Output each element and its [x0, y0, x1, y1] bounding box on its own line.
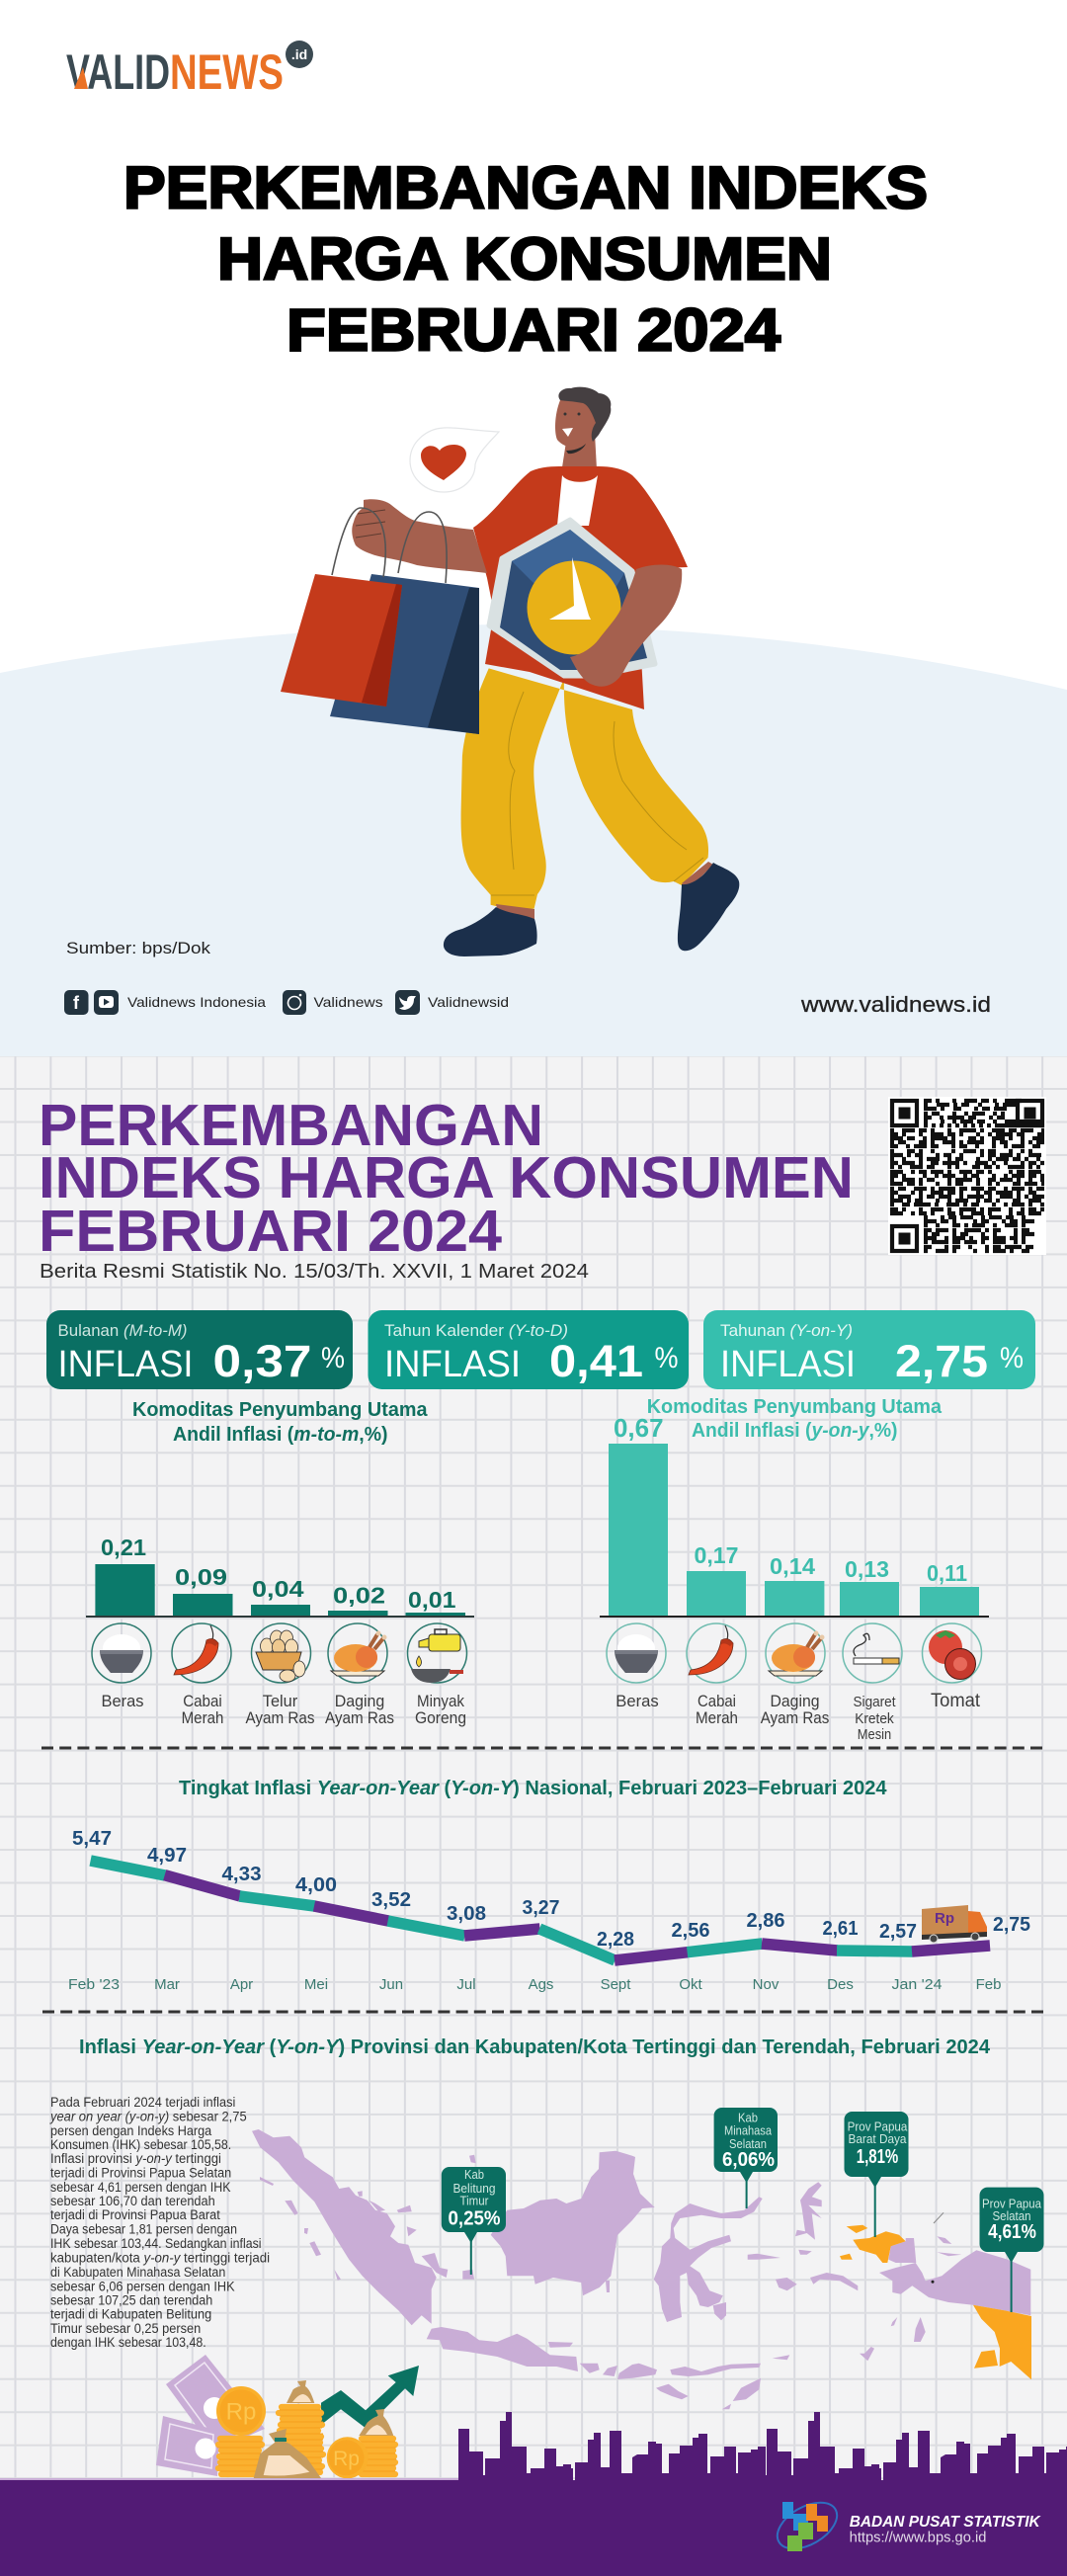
BPS logo: [770, 2493, 845, 2558]
map heading: Inflasi Year-on-Year (Y-on-Y) Provinsi dan Kabupaten/Kota Tertinggi dan Terendah, Februari 2024: [79, 2036, 991, 2058]
explanatory paragraph: terjadi di Provinsi Papua Selatan: [50, 2166, 231, 2180]
commodity labels: Telur: [263, 1693, 298, 1710]
icon: red chili: [172, 1623, 231, 1683]
commodity labels: Beras: [101, 1693, 144, 1710]
line chart: national y-on-y inflation: 3,08: [447, 1902, 486, 1925]
callout: Kab Belitung Timur: [442, 2167, 506, 2275]
card: year-to-date inflation: INFLASI: [384, 1344, 521, 1385]
chart heading: [132, 1398, 428, 1446]
chart heading: Komoditas Penyumbang Utama: [132, 1398, 428, 1421]
main title: PERKEMBANGAN INDEKS: [123, 154, 928, 221]
province: Papua Barat Daya: [840, 2225, 906, 2263]
blue shopping bag: [330, 512, 479, 734]
social name: Validnews Indonesia: Validnews Indonesia: [127, 994, 266, 1010]
icon: tomato: [923, 1623, 982, 1683]
line chart: national y-on-y inflation: Des: [827, 1976, 854, 1993]
explanatory paragraph: sebesar 4,61 persen dengan IHK: [50, 2180, 231, 2195]
Maluku islands: [748, 2182, 961, 2361]
island: Sumatra: [252, 2129, 437, 2325]
commodity labels: Sigaret: [854, 1694, 896, 1710]
card: year-on-year inflation: 2,75: [895, 1336, 988, 1386]
card: year-to-date inflation: Tahun Kalender (Y-to-D): [384, 1321, 568, 1340]
card: monthly inflation: [46, 1310, 353, 1389]
chart heading: Komoditas Penyumbang Utama: [647, 1395, 943, 1418]
explanatory paragraph: dengan IHK sebesar 103,48.: [50, 2335, 206, 2350]
card: year-on-year inflation: Tahunan (Y-on-Y): [720, 1321, 853, 1340]
infographic title: PERKEMBANGAN: [39, 1092, 543, 1158]
icon: twitter: [395, 990, 420, 1015]
bar chart: 0,04: [252, 1576, 304, 1602]
main title: [123, 154, 928, 364]
coin: Rp small: [327, 2437, 369, 2478]
commodity labels: Cabai: [183, 1693, 222, 1710]
chart heading: Andil Inflasi (y-on-y,%): [692, 1419, 897, 1442]
callout: Kab Belitung Timur: Belitung: [452, 2181, 496, 2196]
coin: Rp small: Rp: [333, 2448, 360, 2470]
bar chart: 0,67: [614, 1413, 664, 1443]
explanatory paragraph: sebesar 6,06 persen dengan IHK: [50, 2279, 235, 2294]
explanatory paragraph: Daya sebesar 1,81 persen dengan: [50, 2221, 237, 2236]
explanatory paragraph: Inflasi provinsi y-on-y tertinggi: [50, 2151, 221, 2166]
line chart: national y-on-y inflation: 3,27: [522, 1896, 559, 1919]
explanatory paragraph: Timur sebesar 0,25 persen: [50, 2321, 201, 2336]
line chart: national y-on-y inflation: Jun: [379, 1976, 403, 1993]
bar chart: 0,13: [845, 1556, 889, 1582]
social name: Validnews: Validnews: [314, 994, 383, 1010]
explanatory paragraph: sebesar 106,70 dan terendah: [50, 2194, 215, 2208]
callout: Prov Papua Barat Daya: Prov Papua: [848, 2119, 908, 2134]
line chart: national y-on-y inflation: 4,33: [221, 1863, 261, 1885]
icon: cigarette: [843, 1623, 902, 1683]
callout: Prov Papua Barat Daya: 1,81%: [857, 2146, 898, 2168]
bar chart: [600, 1413, 989, 1617]
card: year-on-year inflation: INFLASI: [720, 1344, 856, 1385]
bar chart: [86, 1535, 474, 1617]
yellow trousers: [461, 668, 708, 909]
website: www.validnews.id: [800, 992, 991, 1017]
face: [555, 396, 599, 448]
holding arm: [570, 565, 682, 687]
callout: Kab Belitung Timur: 0,25%: [449, 2208, 501, 2230]
main title: FEBRUARI 2024: [287, 296, 781, 364]
clock shield: [489, 520, 655, 676]
card: year-on-year inflation: %: [1000, 1342, 1024, 1374]
line chart: national y-on-y inflation: Feb '23: [68, 1976, 120, 1993]
line chart: national y-on-y inflation: 2,56: [672, 1919, 709, 1942]
line chart: national y-on-y inflation: Mei: [304, 1976, 328, 1993]
icon: cooking oil: [407, 1623, 466, 1683]
ankles: [496, 862, 713, 921]
line chart: national y-on-y inflation: 3,52: [371, 1888, 411, 1911]
line chart: national y-on-y inflation: [68, 1827, 1030, 1993]
map of Indonesia: [252, 2129, 1031, 2409]
subtitle: release number: Berita Resmi Statistik No. 15/03/Th. XXVII, 1 Maret 2024: [40, 1260, 589, 1283]
line chart: national y-on-y inflation: Jan '24: [891, 1976, 943, 1993]
explanatory paragraph: terjadi di Kabupaten Belitung: [50, 2306, 211, 2321]
card: year-to-date inflation: [368, 1310, 689, 1389]
icon: rice bowl: [607, 1623, 666, 1683]
commodity labels: Tomat: [931, 1691, 981, 1711]
red jacket: [473, 466, 688, 709]
callout: Prov Papua Selatan: [980, 2188, 1043, 2312]
line chart: national y-on-y inflation: Feb: [976, 1976, 1001, 1993]
explanatory paragraph: persen dengan Indeks Harga: [50, 2123, 212, 2138]
callout: Kab Minahasa Selatan: Kab: [738, 2110, 758, 2124]
footer band with skyline: [0, 2412, 1067, 2576]
line chart: national y-on-y inflation: 2,28: [597, 1928, 634, 1951]
commodity labels: Mesin: [858, 1726, 891, 1743]
Validnews logo: VALID: [66, 44, 170, 100]
explanatory paragraph: Konsumen (IHK) sebesar 105,58.: [50, 2137, 231, 2152]
island: Kalimantan: [491, 2151, 655, 2295]
right money bag: [359, 2409, 393, 2436]
Validnews logo: [66, 41, 313, 100]
shoes: [444, 863, 739, 956]
commodity labels: Ayam Ras: [245, 1709, 314, 1727]
explanatory paragraph: sebesar 107,25 dan terendah: [50, 2292, 212, 2307]
icon: instagram: [283, 990, 306, 1015]
province: Papua Selatan: [973, 2305, 1031, 2379]
line chart: national y-on-y inflation: 5,47: [72, 1827, 112, 1850]
callout: Kab Minahasa Selatan: Minahasa: [724, 2122, 773, 2137]
islands around Sumatra: [260, 2155, 476, 2281]
commodity labels: [101, 1693, 466, 1727]
commodity labels: Cabai: [698, 1693, 736, 1710]
line chart: national y-on-y inflation: Jul: [456, 1976, 476, 1993]
social name: Validnewsid: Validnewsid: [428, 994, 509, 1010]
line chart: national y-on-y inflation: 2,57: [879, 1920, 917, 1943]
callout: Kab Minahasa Selatan: 6,06%: [722, 2149, 775, 2171]
card: year-on-year inflation: [703, 1310, 1035, 1389]
commodity labels: Merah: [182, 1709, 223, 1727]
explanatory paragraph: Pada Februari 2024 terjadi inflasi: [50, 2095, 235, 2110]
explanatory paragraph: di Kabupaten Minahasa Selatan: [50, 2265, 225, 2280]
BPS name: BADAN PUSAT STATISTIK: [850, 2514, 1041, 2531]
line chart: national y-on-y inflation: Ags: [529, 1976, 553, 1993]
card: year-to-date inflation: %: [654, 1342, 678, 1374]
bar chart: 0,09: [175, 1564, 227, 1590]
main title: HARGA KONSUMEN: [217, 225, 832, 292]
coin: Rp large: [216, 2386, 266, 2436]
banknotes: [156, 2355, 265, 2476]
social media row: [64, 990, 509, 1015]
Validnews logo: .id: [291, 46, 307, 62]
illustration: shopper with bags and clock shield: [281, 387, 739, 956]
explanatory paragraph: kabupaten/kota y-on-y tertinggi terjadi: [50, 2251, 270, 2265]
line chart: national y-on-y inflation: 2,86: [747, 1909, 784, 1932]
commodity labels: Daging: [771, 1693, 820, 1710]
commodity labels: Minyak: [417, 1693, 465, 1710]
icon: facebook: f: [73, 993, 80, 1013]
line chart heading: Tingkat Inflasi Year-on-Year (Y-on-Y) Nasional, Februari 2023–Februari 2024: [179, 1777, 887, 1799]
middle money bag top: [287, 2380, 314, 2403]
callout: Kab Belitung Timur: Timur: [460, 2194, 489, 2208]
card: monthly inflation: Bulanan (M-to-M): [57, 1321, 188, 1340]
callout: Kab Belitung Timur: Kab: [464, 2167, 484, 2182]
icon: red chili: [687, 1623, 746, 1683]
panel: y-on-y commodity contributions: [600, 1395, 989, 1743]
source caption: Sumber: bps/Dok: [66, 939, 211, 957]
chart heading: [647, 1395, 943, 1442]
commodity labels: Kretek: [855, 1710, 894, 1727]
icon: roast chicken: [766, 1623, 825, 1683]
panel: m-to-m commodity contributions: [86, 1398, 474, 1727]
line chart: national y-on-y inflation: 4,97: [147, 1844, 187, 1867]
bar chart: 0,11: [927, 1560, 967, 1586]
line chart: national y-on-y inflation: Okt: [679, 1976, 702, 1993]
icon: delivery truck: Rp: [935, 1910, 954, 1927]
coin stacks: [218, 2407, 395, 2474]
line chart: national y-on-y inflation: Apr: [230, 1976, 253, 1993]
extended arm: [352, 499, 487, 573]
illustration: money, coins and rising arrow: [156, 2355, 419, 2478]
red shopping bag: [281, 508, 402, 706]
bar chart: 0,02: [333, 1583, 385, 1609]
arrow: [321, 2366, 419, 2428]
icon: eggs: [251, 1623, 310, 1683]
explanatory paragraph: IHK sebesar 103,44. Sedangkan inflasi: [50, 2236, 261, 2251]
infographic title: FEBRUARI 2024: [39, 1198, 502, 1264]
hero background: [0, 0, 1067, 1056]
commodity labels: Ayam Ras: [325, 1709, 394, 1727]
card: monthly inflation: %: [321, 1342, 345, 1374]
explanatory paragraph: terjadi di Provinsi Papua Barat: [50, 2207, 220, 2222]
chart heading: Andil Inflasi (m-to-m,%): [173, 1423, 387, 1446]
commodity labels: Ayam Ras: [761, 1709, 829, 1727]
commodity labels: Daging: [335, 1693, 384, 1710]
island: Sulawesi: [654, 2197, 763, 2322]
Validnews logo: NEWS: [170, 44, 284, 100]
QR code: [888, 1097, 1046, 1255]
line chart: national y-on-y inflation: Sept: [601, 1976, 631, 1993]
card: year-to-date inflation: 0,41: [549, 1336, 643, 1386]
explanatory paragraph: year on year (y-on-y) sebesar 2,75: [49, 2109, 247, 2124]
callout: Prov Papua Selatan: Prov Papua: [982, 2197, 1042, 2211]
front money bag: [254, 2429, 321, 2478]
infographic title: [39, 1092, 854, 1264]
commodity labels: Goreng: [415, 1709, 466, 1727]
infographic title: INDEKS HARGA KONSUMEN: [39, 1144, 854, 1210]
coin: Rp large: Rp: [226, 2399, 256, 2425]
line chart: national y-on-y inflation: 2,61: [822, 1917, 858, 1940]
bar chart: 0,21: [101, 1535, 146, 1560]
icon: youtube: [94, 990, 119, 1015]
card: monthly inflation: INFLASI: [57, 1344, 194, 1385]
callout: Kab Minahasa Selatan: [714, 2108, 778, 2208]
line chart: national y-on-y inflation: Nov: [753, 1976, 780, 1993]
line chart: national y-on-y inflation: Mar: [154, 1976, 180, 1993]
bar chart: 0,14: [770, 1553, 815, 1579]
commodity labels: Beras: [616, 1693, 659, 1710]
callout: Kab Minahasa Selatan: Selatan: [729, 2136, 767, 2151]
commodity labels: Merah: [696, 1709, 738, 1727]
icon: delivery truck: [922, 1905, 987, 1943]
explanatory paragraph: [49, 2095, 270, 2350]
card: monthly inflation: 0,37: [213, 1336, 312, 1386]
bar chart: 0,17: [694, 1542, 739, 1568]
icon: facebook: [64, 990, 89, 1015]
white tee: [557, 475, 598, 526]
lesser Sunda islands: [548, 2342, 789, 2409]
icon: roast chicken: [328, 1623, 387, 1683]
callout: Prov Papua Selatan: 4,61%: [988, 2221, 1036, 2243]
callout: Prov Papua Barat Daya: Barat Daya: [848, 2131, 907, 2146]
island: Papua: [879, 2238, 1030, 2315]
callout: Prov Papua Selatan: Selatan: [992, 2208, 1031, 2223]
bar chart: 0,01: [408, 1587, 456, 1613]
BPS website: https://www.bps.go.id: [850, 2530, 986, 2545]
line chart: national y-on-y inflation: 4,00: [295, 1873, 337, 1896]
icon: rice bowl: [92, 1623, 151, 1683]
icon: heart speech bubble: [410, 428, 499, 492]
line chart: national y-on-y inflation: 2,75: [993, 1913, 1030, 1936]
grid background of infographic: [0, 1056, 1067, 2480]
island: Java: [427, 2327, 578, 2371]
commodity labels: [616, 1691, 981, 1743]
neck: [562, 433, 597, 476]
callout: Prov Papua Barat Daya: [844, 2112, 909, 2237]
